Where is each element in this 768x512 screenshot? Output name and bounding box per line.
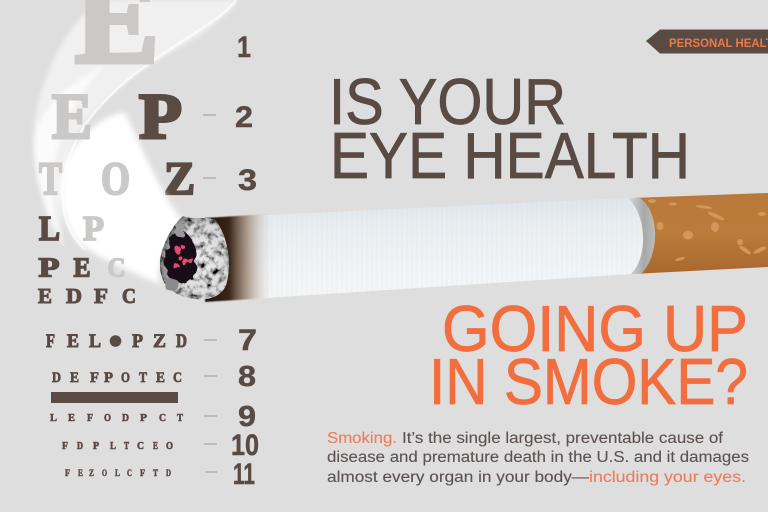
chart row 4: P [83,209,104,248]
chart row 7: P [132,332,143,352]
title: is your eye health [329,65,690,192]
chart row 11: D [166,468,171,478]
chart row 9: L [50,412,57,424]
chart row 9: 9 [238,401,256,433]
paper [205,198,643,302]
chart row 8: T [139,370,147,386]
body paragraph: Smoking. [327,430,397,447]
chart row 2: 2 [235,101,253,134]
body paragraph [327,430,749,486]
chart row 7: L [89,332,101,352]
chart row 9: D [122,412,129,424]
chart letter P row 2: P [139,81,182,153]
chart row 9 [50,401,256,433]
paper ribs [205,198,643,302]
title: is your eye health: IS YOUR [329,65,566,138]
chart row 10: P [93,441,99,452]
chart row 3 [39,153,257,205]
burn mark [205,214,274,302]
cigarette [160,193,768,302]
chart row 7: F [46,332,55,352]
chart row 3: T [39,153,62,205]
chart row 11: O [102,468,107,478]
chart row 9: F [87,412,93,424]
chart row 10: E [153,441,158,452]
chart row 11: F [65,468,70,478]
smoke [33,0,238,285]
section tag [646,30,768,54]
red line bar [51,392,178,403]
chart row 8: O [121,370,130,386]
chart row 8: F [90,370,99,386]
chart row 11: 11 [233,458,255,491]
chart row 5: P [38,252,60,282]
chart row 8: D [52,370,61,386]
chart row 8: E [156,370,165,386]
chart row 7 [46,324,257,357]
title: going up in smoke [429,292,748,418]
chart row 9: P [140,412,147,424]
title: going up in smoke: GOING UP [442,292,748,365]
chart row 10 [62,429,259,462]
chart row 9: E [68,412,75,424]
chart row 8: P [104,370,113,386]
chart row 8: 8 [238,361,256,393]
filter flecks [648,199,767,262]
chart row 6: E [38,284,52,308]
chart row 2 [52,81,253,153]
chart row 4: L [39,209,60,248]
chart row 11: T [153,468,158,478]
chart row 9: C [159,412,166,424]
chart row 10: T [124,441,129,452]
chart row 1: 1 [237,31,251,64]
chart row 10: 10 [231,429,259,462]
chart row 11: F [140,468,145,478]
ash tip [160,216,229,299]
filter band [628,198,655,274]
chart row 8: E [70,370,79,386]
chart row 3: 3 [238,164,257,197]
chart row 7: E [67,332,79,352]
chart row 10: F [62,441,68,452]
chart row 8 [52,361,256,393]
eye chart [38,0,259,491]
filter [632,193,768,274]
chart row 11 [65,458,255,491]
chart row 11: E [78,468,83,478]
chart row 6: C [122,284,136,308]
chart row 1 [75,0,251,90]
chart row 6 [38,284,136,308]
chart row 8: C [173,370,182,386]
body paragraph: disease and premature death in the U.S. and it damages [327,449,749,466]
body paragraph: including your eyes. [589,469,746,486]
chart row 11: L [115,468,120,478]
chart row 11: C [127,468,132,478]
chart row 11: Z [89,468,94,478]
chart row 10: O [166,441,173,452]
body paragraph: It’s the single largest, preventable cause of [402,430,724,447]
chart row 10: D [77,441,83,452]
chart row 4 [39,209,104,248]
chart row 5: E [74,252,90,282]
chart row 7: Z [153,332,166,352]
chart row 9: O [104,412,111,424]
chart row 10: L [110,441,116,452]
chart row 2: E [52,81,92,153]
chart letter Z row 3: Z [164,153,195,205]
chart row 3: O [101,153,130,205]
chart row 9: T [177,412,184,424]
chart row 6: F [94,284,108,308]
chart row 7: 7 [238,324,257,357]
chart row 10: C [137,441,144,452]
chart row 5 [38,252,126,282]
title: is your eye health: EYE HEALTH [330,119,690,192]
chart row 5: C [108,252,126,282]
body paragraph: almost every organ in your body— [327,469,590,486]
chart row 6: D [66,284,82,308]
chart row 7: D [176,332,187,352]
